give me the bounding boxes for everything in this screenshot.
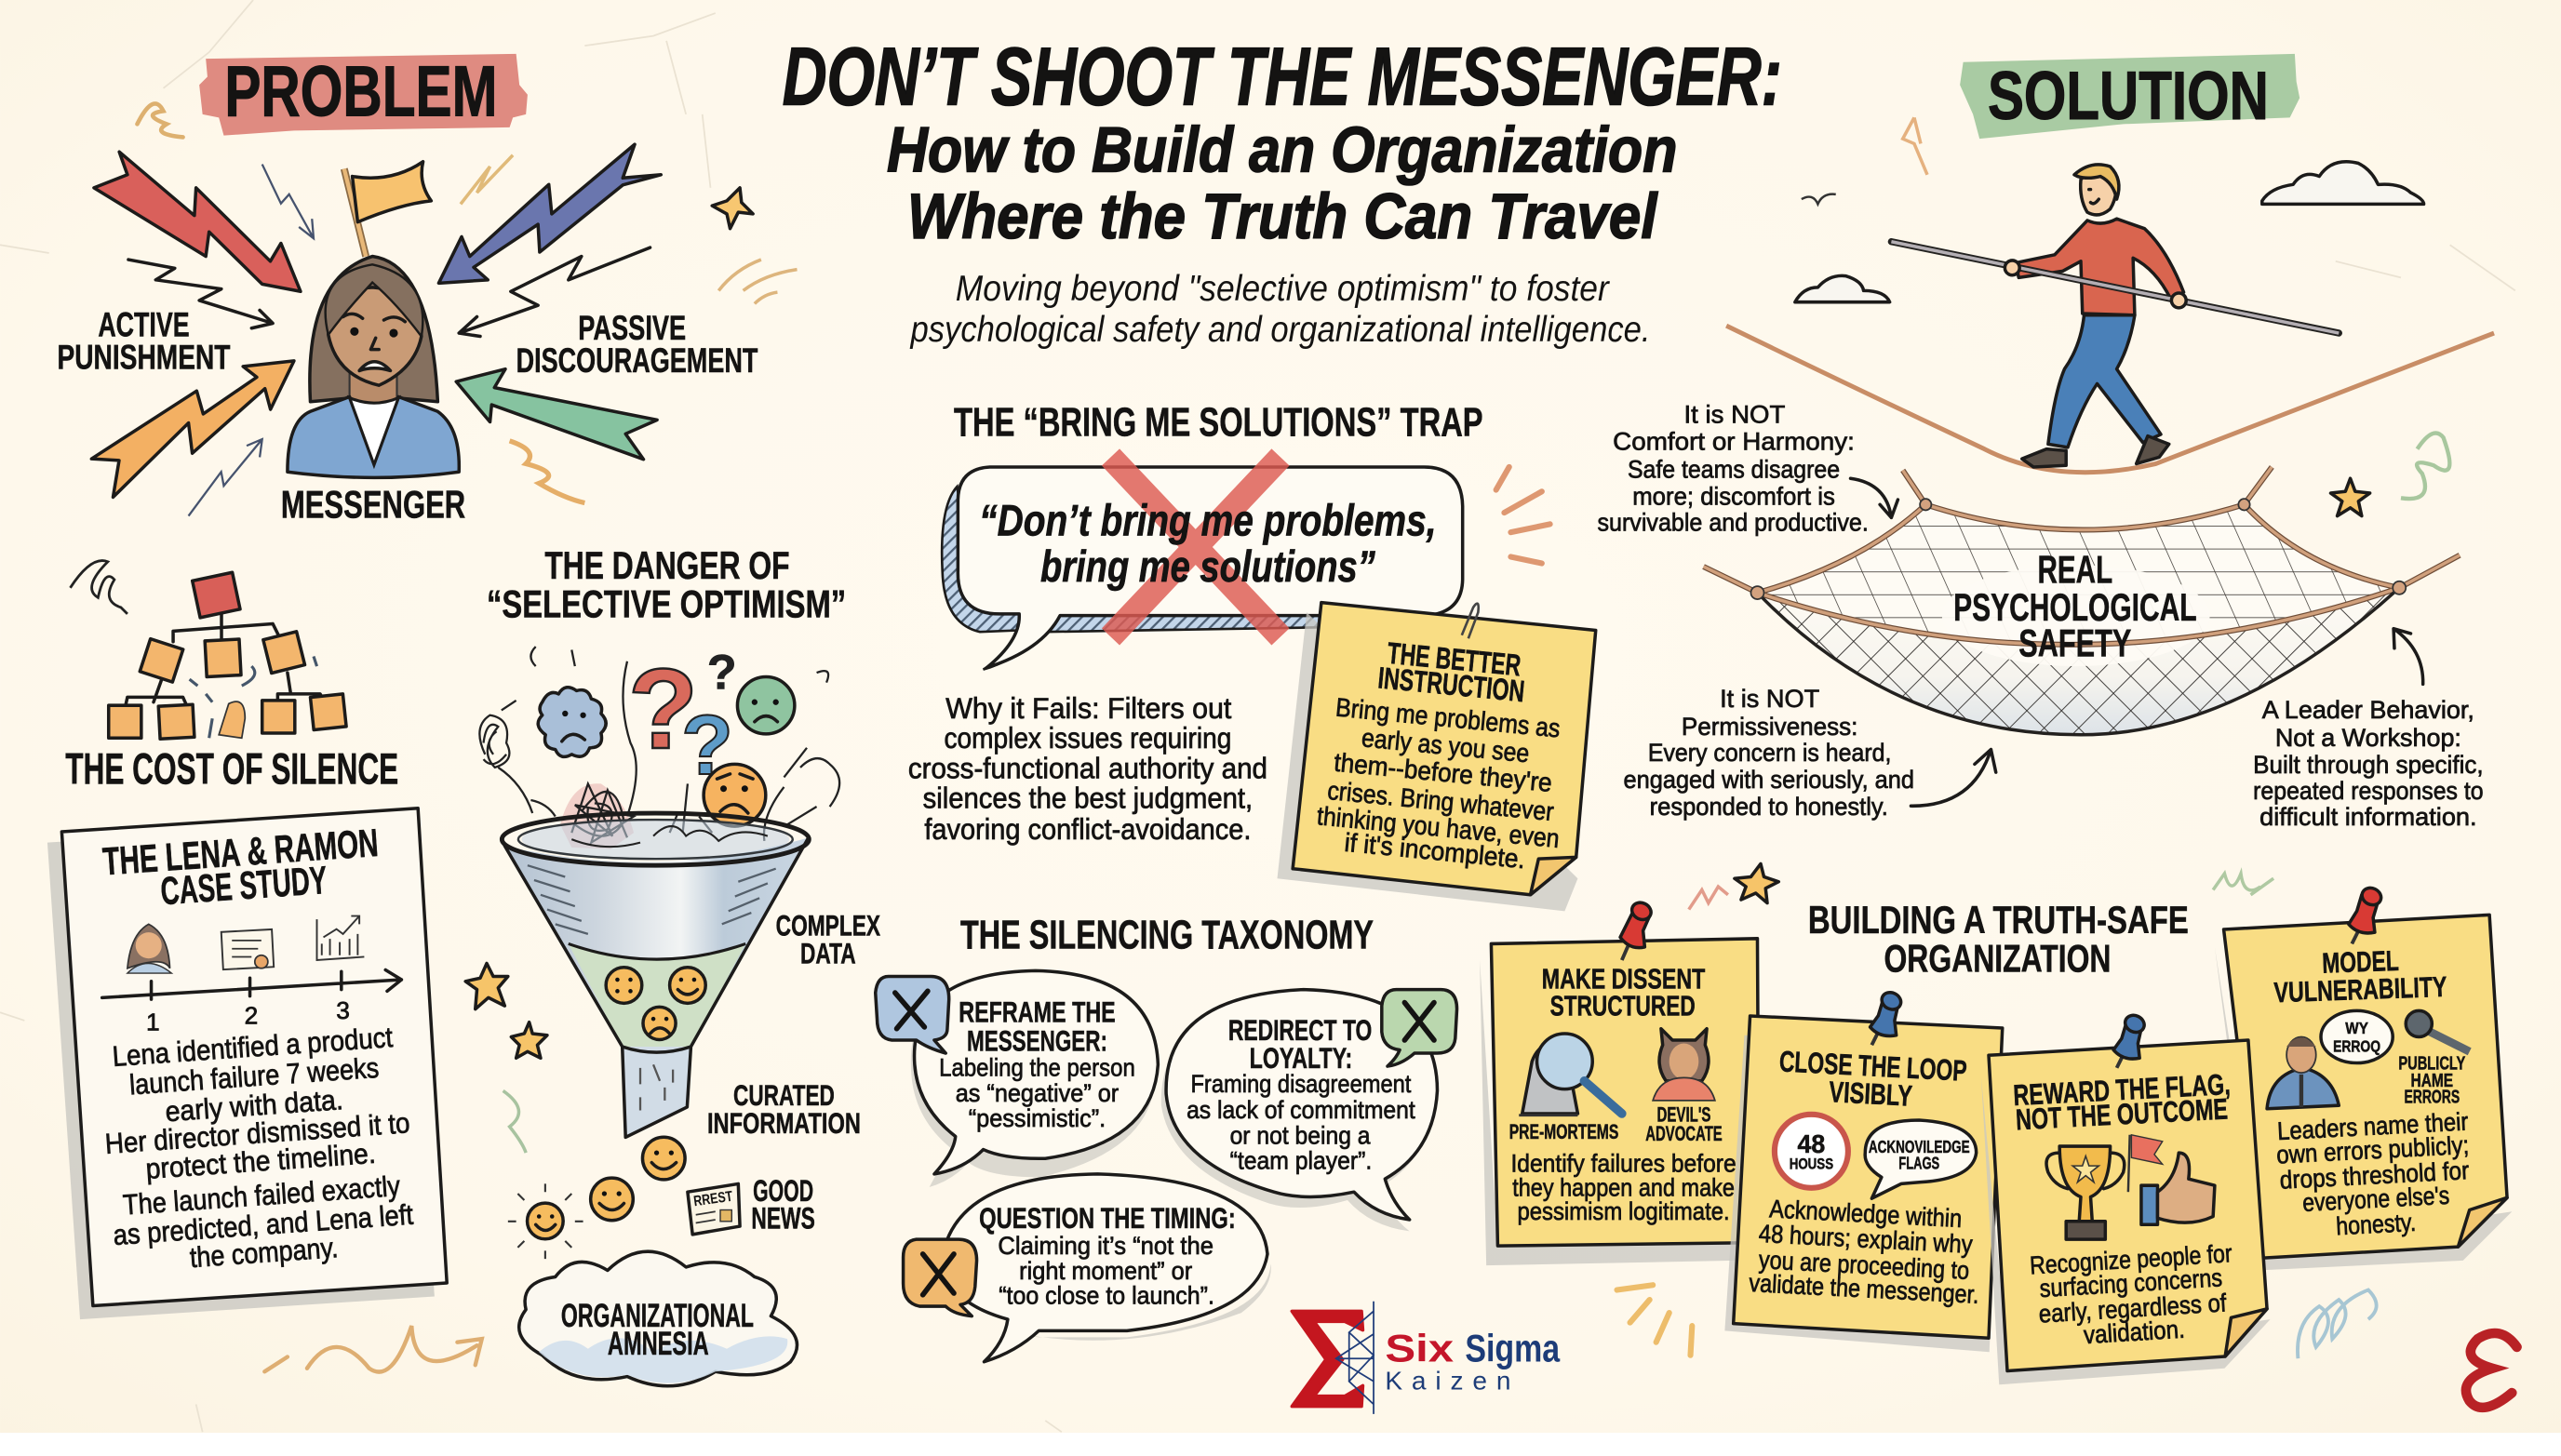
bubble: redirect to loyalty: “team player”.	[1230, 1146, 1372, 1175]
sticky note: make dissent structured: PRE-MORTEMS	[1509, 1120, 1618, 1143]
case study heading: THE LENA & RAMON	[101, 821, 380, 884]
icon: 48 hours clock: HOUSS	[1790, 1155, 1833, 1173]
bubble: reframe the messenger	[876, 970, 1158, 1187]
subtitle	[910, 269, 1651, 350]
sticky note: model vulnerability: PUBLICLY	[2398, 1054, 2466, 1075]
decorative accents: right	[1802, 117, 2449, 516]
logo: six sigma kaizen: Kaizen	[1385, 1367, 1510, 1396]
organizational amnesia cloud: AMNESIA	[608, 1326, 709, 1362]
panel: problem	[57, 52, 758, 526]
icon: blue x badge	[876, 977, 949, 1053]
case study body: protect the timeline.	[144, 1137, 377, 1185]
logo: six sigma kaizen: Sigma	[1465, 1327, 1561, 1370]
title: How to Build an Organization	[887, 114, 1677, 185]
sticky note: close the loop: validate the messenger.	[1749, 1268, 1979, 1309]
sticky note: close the loop: 48 hours; explain why	[1758, 1219, 1974, 1259]
organizational amnesia cloud	[519, 1251, 797, 1386]
icon: paperclip	[1462, 604, 1479, 638]
sticky note: model vulnerability: Leaders name their	[2276, 1106, 2469, 1145]
pin: red	[1620, 900, 1654, 960]
sticky note: make dissent structured	[1480, 900, 1759, 1265]
sticky note: make dissent structured: MAKE DISSENT	[1542, 963, 1706, 995]
chaotic inputs above funnel: ?	[628, 646, 698, 773]
callout: not permissiveness: Every concern is heard,	[1648, 738, 1891, 767]
icon: acknowledge flags bubble	[1865, 1120, 1977, 1198]
timeline	[102, 916, 401, 1035]
icon: green x badge	[1382, 990, 1457, 1066]
sticky note: make dissent structured: pessimism logitimate.	[1517, 1196, 1730, 1225]
net label: REAL	[2037, 548, 2112, 592]
why it fails text: favoring conflict-avoidance.	[924, 812, 1251, 846]
bubble: reframe the messenger: MESSENGER:	[967, 1023, 1107, 1057]
speech bubble: “Don’t bring me problems,	[979, 497, 1437, 546]
bubble: redirect to loyalty: or not being a	[1230, 1120, 1371, 1149]
title: Where the Truth Can Travel	[907, 180, 1658, 252]
case study body: Lena identified a product	[112, 1021, 395, 1073]
heading: problem: PROBLEM	[224, 52, 497, 132]
sticky note: better instruction: Bring me problems as	[1334, 693, 1562, 743]
tightrope walker	[2016, 165, 2184, 467]
bubble: reframe the messenger: as “negative” or	[956, 1078, 1119, 1107]
panel: solution	[1597, 54, 2494, 831]
decorative accents: bottom right	[1617, 863, 2377, 1358]
sticky note: make dissent structured: they happen and make	[1512, 1173, 1735, 1202]
why it fails text: Why it Fails: Filters out	[945, 691, 1232, 725]
sticky note: model vulnerability: everyone else's	[2301, 1181, 2450, 1217]
title: DON’T SHOOT THE MESSENGER:	[783, 31, 1782, 122]
callout: not comfort: Comfort or Harmony:	[1613, 427, 1855, 456]
heading: selective optimism: “SELECTIVE OPTIMISM”	[487, 581, 846, 625]
sticky note: better instruction: thinking you have, even	[1316, 801, 1561, 853]
decorative stars	[465, 963, 547, 1153]
bubble: reframe the messenger: Labeling the person	[939, 1053, 1135, 1082]
heading: taxonomy: THE SILENCING TAXONOMY	[960, 913, 1374, 958]
icon: orange x badge	[904, 1239, 977, 1316]
arrow: comfort to net	[1851, 478, 1897, 517]
label: good news	[751, 1174, 815, 1236]
sticky note: make dissent structured: STRUCTURED	[1550, 990, 1696, 1022]
case study heading: CASE STUDY	[159, 858, 329, 913]
sticky note: close the loop: Acknowledge within	[1769, 1194, 1963, 1233]
heading: trap: THE “BRING ME SOLUTIONS” TRAP	[954, 400, 1483, 446]
arrow: navy lightning	[438, 144, 661, 283]
callout: not permissiveness	[1624, 684, 1914, 821]
balance pole	[1891, 242, 2339, 333]
arrow: thin black left	[128, 260, 273, 328]
sticky note: reward the flag: surfacing concerns	[2039, 1262, 2223, 1302]
case study body: early with data.	[164, 1083, 344, 1128]
heading: selective optimism: THE DANGER OF	[544, 543, 790, 587]
accent strokes	[1496, 467, 1550, 564]
arrow: thin black right	[459, 247, 650, 337]
arrow: orange lightning	[91, 361, 294, 497]
icon: tombstone and magnifier	[1519, 1034, 1622, 1115]
label: passive discouragement: DISCOURAGEMENT	[516, 341, 758, 380]
arrow: leader to net	[2393, 629, 2423, 684]
org chart icon	[109, 572, 346, 739]
net label: SAFETY	[2018, 621, 2131, 665]
pin: blue	[2113, 1012, 2147, 1068]
callout: leader behavior	[2253, 695, 2484, 831]
logo: six sigma kaizen: Six	[1385, 1327, 1455, 1370]
sticky note: better instruction: crises. Bring whatever	[1326, 776, 1555, 826]
sticky note: close the loop	[1724, 989, 2003, 1352]
callout: not permissiveness: engaged with seriously, and	[1624, 765, 1914, 794]
bubble: redirect to loyalty: as lack of commitment	[1187, 1095, 1415, 1124]
why it fails text: complex issues requiring	[944, 721, 1231, 755]
smiley outputs	[508, 1137, 685, 1259]
case study body: Her director dismissed it to	[104, 1106, 411, 1160]
net label: PSYCHOLOGICAL	[1953, 585, 2197, 629]
sticky note: better instruction: if it's incomplete.	[1343, 828, 1526, 874]
why it fails text	[908, 691, 1267, 846]
sticky note: better instruction: THE BETTER	[1386, 636, 1522, 682]
sticky note: make dissent structured: Identify failures before	[1510, 1148, 1736, 1177]
bubble: redirect to loyalty	[1161, 990, 1457, 1231]
chaotic inputs above funnel	[479, 646, 839, 849]
sticky note: model vulnerability: VULNERABILITY	[2273, 970, 2447, 1009]
callout: leader behavior: A Leader Behavior,	[2262, 695, 2474, 724]
icon: microphone	[2406, 1010, 2470, 1051]
safety net	[1704, 467, 2460, 735]
panel: building a truth-safe organization	[1480, 863, 2512, 1384]
sticky note: close the loop: VISIBLY	[1829, 1075, 1913, 1113]
icon: devil's advocate	[1653, 1029, 1715, 1101]
panel: selective optimism	[465, 543, 880, 1386]
sticky note: reward the flag: NOT THE OUTCOME	[2015, 1091, 2229, 1136]
case study body: launch failure 7 weeks	[128, 1051, 380, 1101]
bubble: redirect to loyalty: REDIRECT TO	[1228, 1013, 1372, 1047]
callout: not comfort: more; discomfort is	[1632, 481, 1835, 510]
arrow: red lightning	[94, 152, 301, 291]
timeline: 1	[146, 1008, 160, 1035]
bubble: reframe the messenger: REFRAME THE	[959, 995, 1116, 1029]
bubble: question the timing: Claiming it’s “not the	[998, 1231, 1213, 1260]
icon: flag	[344, 162, 431, 257]
heading: selective optimism	[487, 543, 846, 625]
icon: acknowledge flags bubble: FLAGS	[1898, 1154, 1939, 1173]
label: messenger: MESSENGER	[281, 482, 465, 526]
heading: truth-safe	[1808, 898, 2189, 980]
sticky note: reward the flag	[1981, 1012, 2271, 1384]
icon: red epsilon mark	[2466, 1333, 2517, 1408]
funnel	[502, 813, 809, 1137]
net label	[1953, 548, 2197, 665]
panel: silencing taxonomy	[876, 913, 1457, 1362]
sticky note: model vulnerability: ERRORS	[2404, 1088, 2460, 1108]
arrow: thin navy bottom	[189, 439, 262, 516]
callout: not permissiveness: responded to honestly.	[1650, 792, 1888, 821]
bubble: question the timing	[904, 1174, 1271, 1362]
callout: not comfort	[1597, 400, 1869, 536]
messenger figure	[288, 257, 459, 477]
label: curated information	[707, 1078, 861, 1140]
label: active punishment	[57, 306, 231, 377]
chaotic inputs above funnel: ?	[681, 698, 733, 793]
sticky note: reward the flag: early, regardless of	[2038, 1288, 2228, 1329]
sticky note: model vulnerability: MODEL	[2322, 944, 2399, 980]
icon: thought bubble	[2321, 1010, 2393, 1063]
label: complex data: DATA	[800, 936, 856, 969]
callout: leader behavior: Built through specific,	[2253, 750, 2484, 779]
bubble: reframe the messenger: “pessimistic”.	[969, 1103, 1106, 1132]
sticky note: better instruction: them--before they're	[1333, 748, 1553, 797]
heading: truth-safe: BUILDING A TRUTH-SAFE	[1808, 898, 2189, 942]
subtitle: Moving beyond "selective optimism" to foster	[956, 269, 1611, 309]
arrow: permissiveness to net	[1911, 750, 1996, 806]
icon: red X	[1110, 457, 1280, 636]
callout: not permissiveness: It is NOT	[1720, 684, 1819, 713]
sticky note: reward the flag: validation.	[2083, 1315, 2186, 1349]
bubble: question the timing: “too close to launch”.	[999, 1280, 1214, 1309]
sticky note: model vulnerability: honesty.	[2335, 1208, 2417, 1240]
icon: thought bubble: WY	[2345, 1019, 2368, 1037]
chaotic inputs above funnel: ?	[707, 646, 737, 701]
case study body: as predicted, and Lena left	[112, 1198, 414, 1251]
bubble: question the timing: right moment” or	[1019, 1256, 1192, 1285]
decorative accents: left top	[137, 103, 797, 503]
label: passive discouragement: PASSIVE	[578, 309, 686, 347]
organizational amnesia cloud: ORGANIZATIONAL	[561, 1298, 754, 1334]
sticky note: reward the flag: REWARD THE FLAG,	[2012, 1067, 2231, 1112]
subtitle: psychological safety and organizational intelligence.	[910, 310, 1651, 350]
sticky note: model vulnerability: own errors publicly;	[2275, 1130, 2470, 1169]
bubble: redirect to loyalty: Framing disagreement	[1190, 1069, 1412, 1098]
speech bubble	[942, 457, 1463, 670]
sticky note: make dissent structured: ADVOCATE	[1645, 1122, 1723, 1145]
label: curated information: INFORMATION	[707, 1106, 861, 1140]
label: complex data: COMPLEX	[776, 909, 880, 942]
icon: newspaper	[688, 1183, 740, 1235]
case study heading	[101, 821, 380, 913]
sticky note: model vulnerability	[2215, 885, 2512, 1270]
logo: six sigma kaizen	[1292, 1302, 1561, 1414]
sticky note: better instruction: INSTRUCTION	[1376, 661, 1526, 708]
speech bubble: bring me solutions”	[1040, 542, 1375, 592]
callout: not comfort: Safe teams disagree	[1628, 454, 1840, 483]
title	[783, 31, 1782, 252]
callout: not comfort: It is NOT	[1684, 400, 1785, 429]
timeline: 2	[245, 1001, 258, 1029]
icon: trophy	[2046, 1146, 2125, 1239]
case study body	[104, 1021, 414, 1274]
label: passive discouragement	[516, 309, 758, 380]
heading: truth-safe: ORGANIZATION	[1884, 936, 2111, 980]
sticky note: model vulnerability: drops threshold for	[2279, 1155, 2470, 1195]
case study body: the company.	[189, 1231, 339, 1274]
icon: newspaper: RREST	[692, 1189, 734, 1209]
icon: 48 hours clock: 48	[1797, 1129, 1825, 1158]
label: active punishment: PUNISHMENT	[57, 339, 231, 377]
sticky note: close the loop: you are proceeding to	[1758, 1245, 1970, 1285]
panel: cost of silence	[47, 561, 482, 1372]
arrow: thin navy top	[262, 165, 314, 238]
heading: solution: SOLUTION	[1988, 57, 2269, 134]
timeline: 3	[336, 996, 350, 1024]
icon: 48 hours clock	[1775, 1115, 1848, 1188]
pin: blue	[1870, 989, 1904, 1045]
arrow: green	[456, 369, 657, 460]
label: complex data	[776, 909, 880, 969]
icon: acknowledge flags bubble: ACKNOVILEDGE	[1869, 1137, 1970, 1156]
bubble: question the timing: QUESTION THE TIMING:	[979, 1201, 1236, 1235]
label: good news: GOOD	[753, 1174, 813, 1208]
label: good news: NEWS	[751, 1202, 815, 1236]
tightrope	[1726, 326, 2494, 473]
why it fails text: silences the best judgment,	[923, 781, 1253, 815]
icon: leader figure	[2267, 1036, 2339, 1109]
sticky note: better instruction	[1277, 603, 1596, 911]
sticky note: reward the flag: Recognize people for	[2029, 1238, 2232, 1279]
label: active punishment: ACTIVE	[98, 306, 190, 344]
sticky note: model vulnerability: HAME	[2411, 1071, 2453, 1091]
pin: red	[2349, 885, 2384, 943]
callout: leader behavior: repeated responses to	[2253, 776, 2484, 805]
callout: leader behavior: difficult information.	[2259, 802, 2477, 831]
panel: bring me solutions trap	[908, 400, 1596, 911]
bubble: redirect to loyalty: LOYALTY:	[1250, 1041, 1352, 1075]
why it fails text: cross-functional authority and	[908, 751, 1267, 784]
callout: not comfort: survivable and productive.	[1597, 507, 1869, 536]
sticky note: close the loop: CLOSE THE LOOP	[1778, 1044, 1968, 1088]
sticky note: better instruction: early as you see	[1361, 723, 1531, 768]
icon: thumbs up	[2141, 1153, 2215, 1224]
case study body: The launch failed exactly	[122, 1169, 402, 1222]
clouds	[1795, 162, 2424, 302]
icon: flag	[2128, 1135, 2163, 1192]
icon: thought bubble: ERROQ	[2333, 1036, 2380, 1055]
scribble	[70, 561, 127, 614]
squiggle arrow	[264, 1326, 482, 1372]
callout: leader behavior: Not a Workshop:	[2275, 723, 2461, 752]
callout: not permissiveness: Permissiveness:	[1682, 712, 1857, 741]
sticky note: make dissent structured: DEVIL'S	[1657, 1103, 1710, 1127]
heading: cost of silence: THE COST OF SILENCE	[65, 744, 398, 794]
case study card	[47, 808, 447, 1319]
label: curated information: CURATED	[733, 1078, 835, 1112]
